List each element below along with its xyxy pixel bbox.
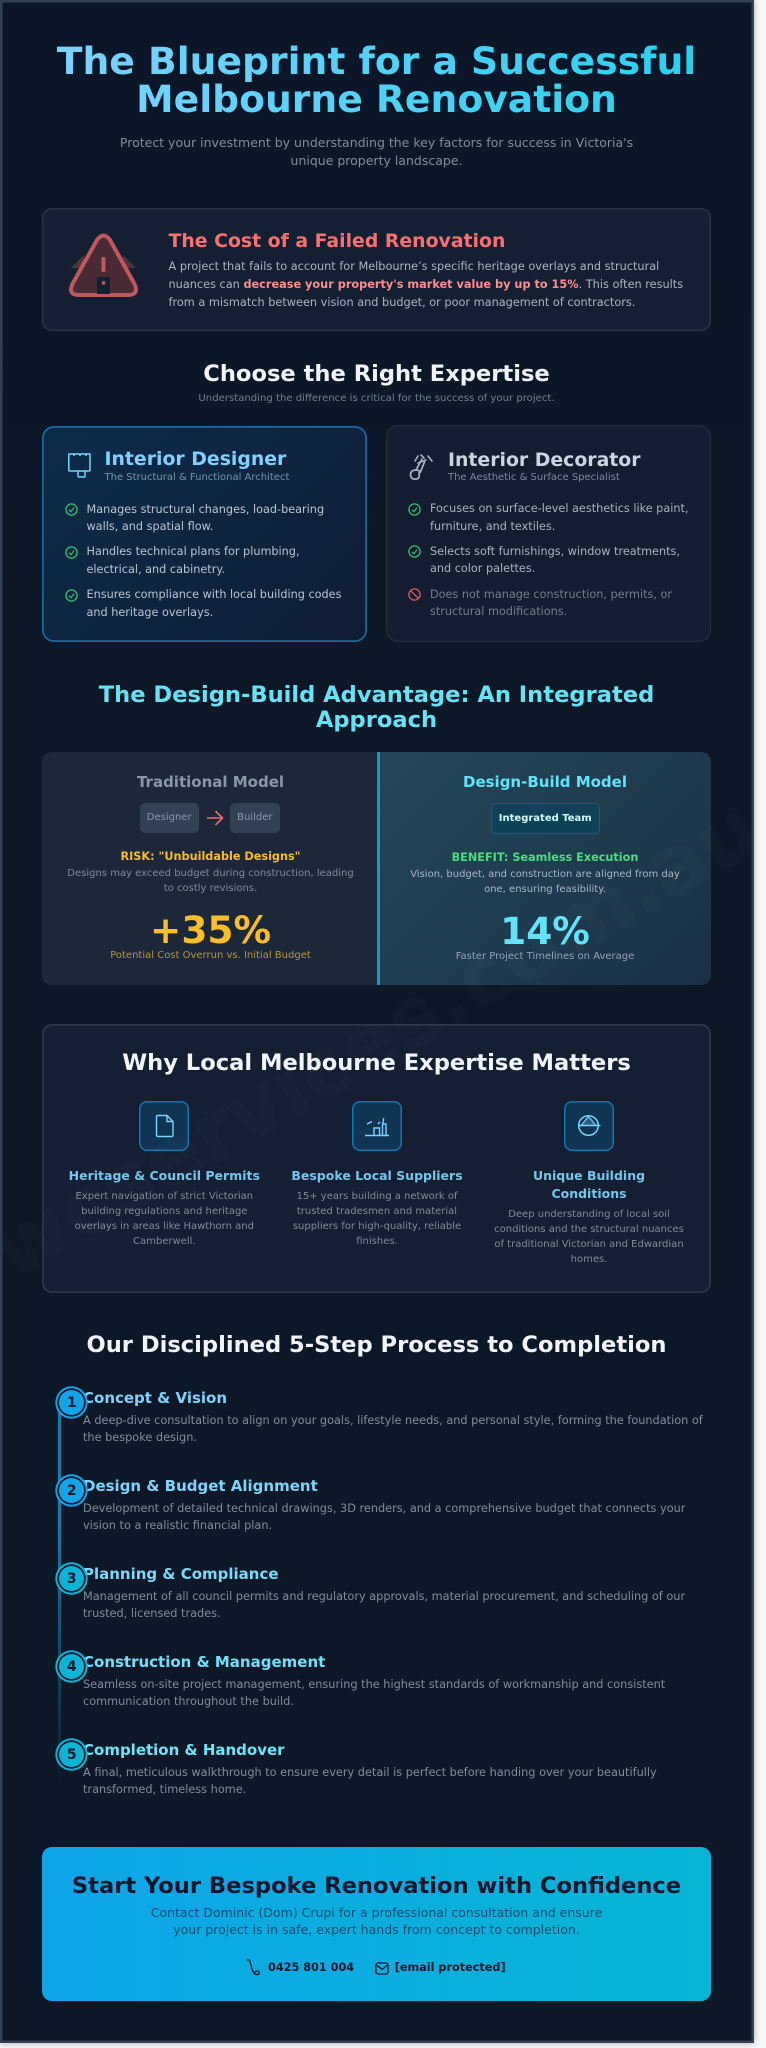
- chip: builder: Builder: [237, 812, 272, 823]
- panel: interior decorator: [386, 425, 711, 642]
- heading: process: Our Disciplined 5-Step Process to Completion: [87, 1332, 666, 1358]
- icon: paint brush: [410, 454, 433, 480]
- list item: compliance: [65, 588, 341, 619]
- step 1 text: [83, 1414, 703, 1444]
- chip: designer: Designer: [147, 812, 192, 823]
- text: risk description: Designs may exceed budget during construction, leading: [67, 868, 354, 879]
- column: unique building conditions: [494, 1101, 684, 1265]
- icon: blueprint board: [68, 453, 91, 478]
- list item: compliance: and heritage overlays.: [86, 606, 213, 619]
- step 2 number: 2: [67, 1483, 77, 1499]
- phone number: 0425 801 004: [268, 1961, 354, 1974]
- step 5 number: 5: [67, 1747, 77, 1763]
- subtitle: [120, 135, 633, 168]
- stat: +35%: +35%: [150, 908, 271, 952]
- column text: of traditional Victorian and Edwardian: [494, 1239, 684, 1250]
- text: cost explanation: from a mismatch between vision and budget, or poor management of contractors.: [168, 296, 635, 309]
- chip: designer: [140, 803, 199, 833]
- column text: building regulations and heritage: [81, 1206, 247, 1217]
- list item: does not manage construction: [408, 588, 672, 618]
- text: benefit description: one, ensuring feasibility.: [484, 884, 606, 895]
- column text: [293, 1191, 461, 1247]
- list item: soft furnishings: and color palettes.: [430, 562, 535, 575]
- heading: design-build advantage: The Design-Build Advantage: An Integrated: [99, 682, 654, 708]
- subtitle: Protect your investment by understanding the key factors for success in Victoria's: [120, 135, 633, 150]
- text: benefit description: [410, 869, 680, 895]
- text: call to action: [151, 1905, 602, 1937]
- chip: builder: [230, 803, 280, 833]
- heading: local expertise: Why Local Melbourne Expertise Matters: [122, 1050, 631, 1076]
- list item: soft furnishings: Selects soft furnishings, window treatments,: [430, 545, 680, 558]
- step 4 number: [59, 1654, 84, 1679]
- column text: [75, 1191, 254, 1247]
- column: heritage and council permits: [69, 1101, 260, 1247]
- step 1: [55, 1386, 703, 1444]
- text: benefit description: Vision, budget, and construction are aligned from day: [410, 869, 680, 880]
- step 3 number: 3: [67, 1571, 77, 1587]
- text: cost explanation: A project that fails to account for Melbourne’s specific heritage overlays and structural: [168, 260, 659, 273]
- step 5 text: A final, meticulous walkthrough to ensure every detail is perfect before handing over your beautifully: [83, 1766, 657, 1778]
- panel: cost of a failed renovation: [42, 208, 711, 331]
- column text: 15+ years building a network of: [297, 1191, 457, 1202]
- step 3 number: [59, 1566, 84, 1591]
- chip: integrated team: Integrated Team: [499, 813, 592, 824]
- column text: Camberwell.: [133, 1236, 196, 1247]
- step 4 text: Seamless on-site project management, ensuring the highest standards of workmanship and consistent: [83, 1678, 665, 1690]
- text: decorator tagline: The Aesthetic & Surface Specialist: [448, 472, 620, 483]
- text: call to action: Contact Dominic (Dom) Crupi for a professional consultation and ensure: [151, 1905, 602, 1920]
- subtitle: unique property landscape.: [291, 153, 462, 168]
- step 2 number: [59, 1478, 84, 1503]
- list item: surface aesthetics: Focuses on surface-level aesthetics like paint,: [430, 502, 688, 515]
- text: cost explanation: nuances can decrease your property's market value by up to 15%. This often results: [168, 278, 683, 291]
- step 3 title: Planning & Compliance: [83, 1565, 279, 1583]
- heading: call to action: Start Your Bespoke Renovation with Confidence: [72, 1873, 681, 1899]
- column text: [494, 1209, 684, 1265]
- step 2 text: vision to a realistic financial plan.: [83, 1519, 272, 1532]
- panel: local expertise: [42, 1024, 711, 1293]
- step 2 title: Design & Budget Alignment: [83, 1477, 318, 1495]
- icon: phone: [246, 1959, 260, 1976]
- column text: suppliers for high-quality, reliable: [293, 1221, 461, 1232]
- panel: call to action: [42, 1847, 711, 2001]
- list item: technical plans: electrical, and cabinetry.: [86, 563, 225, 576]
- column title: Heritage & Council Permits: [69, 1168, 260, 1183]
- benefit label: BENEFIT: Seamless Execution: [452, 851, 638, 864]
- text: risk description: [67, 868, 354, 894]
- column text: overlays in areas like Hawthorn and: [75, 1221, 254, 1232]
- contact row: [246, 1959, 506, 1976]
- panel: traditional vs design-build comparison: [42, 752, 711, 985]
- icon: warning triangle house: [69, 234, 138, 297]
- text: cost explanation: [168, 260, 683, 309]
- column text: trusted tradesmen and material: [297, 1206, 457, 1217]
- text: expertise subheading: Understanding the difference is critical for the success of your project.: [198, 393, 555, 404]
- column: design-build model: [380, 752, 711, 985]
- list item: technical plans: Handles technical plans for plumbing,: [86, 545, 300, 558]
- column title: Unique Building: [533, 1168, 645, 1183]
- column: traditional model: [42, 752, 377, 985]
- heading: traditional model: Traditional Model: [137, 773, 284, 791]
- step 5: [55, 1738, 657, 1796]
- step 5 text: [83, 1766, 657, 1796]
- icon: foundation globe: [564, 1101, 614, 1151]
- column text: finishes.: [356, 1236, 398, 1247]
- step 5 text: transformed, timeless home.: [83, 1783, 246, 1796]
- step 3 text: Management of all council permits and regulatory approvals, material procurement, and scheduling of our: [83, 1590, 685, 1602]
- step 2: [55, 1474, 686, 1532]
- column: bespoke local suppliers: [291, 1101, 463, 1247]
- column title: Conditions: [551, 1186, 627, 1201]
- text: call to action: your project is in safe, expert hands from concept to completion.: [173, 1922, 580, 1937]
- list item: structural changes: Manages structural changes, load-bearing: [86, 503, 324, 516]
- chip: integrated team: [490, 803, 600, 834]
- step 3 text: trusted, licensed trades.: [83, 1607, 221, 1620]
- list item: structural changes: [65, 503, 324, 533]
- heading: cost of failure: The Cost of a Failed Renovation: [168, 231, 505, 252]
- list item: technical plans: [65, 545, 300, 576]
- step 5 title: Completion & Handover: [83, 1741, 285, 1759]
- heading: interior decorator: Interior Decorator: [448, 450, 641, 470]
- text: risk description: to costly revisions.: [164, 883, 257, 894]
- icon: buildings: [352, 1101, 402, 1151]
- title: The Blueprint for a Successful: [57, 39, 696, 83]
- list item: compliance: Ensures compliance with local building codes: [86, 588, 341, 601]
- step 1 title: Concept & Vision: [83, 1389, 227, 1407]
- step 1 text: A deep-dive consultation to align on your goals, lifestyle needs, and personal style, forming the foundation of: [83, 1414, 703, 1426]
- column text: conditions and the structural nuances: [494, 1224, 684, 1235]
- step 4 number: 4: [67, 1659, 77, 1675]
- list item: surface aesthetics: furniture, and textiles.: [430, 520, 555, 533]
- step 1 number: [59, 1390, 84, 1415]
- step 4 text: communication throughout the build.: [83, 1695, 294, 1708]
- column text: homes.: [571, 1254, 607, 1265]
- stat: 14%: 14%: [500, 909, 590, 953]
- icon: red arrow: [207, 810, 224, 826]
- column text: Expert navigation of strict Victorian: [75, 1191, 253, 1202]
- title: Melbourne Renovation: [136, 77, 617, 121]
- icon: document: [139, 1101, 189, 1151]
- stat caption: faster timelines: Faster Project Timelines on Average: [456, 951, 634, 962]
- step 3 text: [83, 1590, 686, 1620]
- heading: interior designer: Interior Designer: [104, 449, 286, 470]
- list item: surface aesthetics: [408, 502, 688, 533]
- list item: soft furnishings: [408, 545, 680, 575]
- column title: Bespoke Local Suppliers: [291, 1168, 463, 1183]
- list item: does not manage construction: structural modifications.: [430, 605, 567, 618]
- step 2 text: Development of detailed technical drawings, 3D renders, and a comprehensive budget that connects your: [83, 1502, 685, 1514]
- step 5 number: [59, 1742, 84, 1767]
- stat caption: cost overrun: Potential Cost Overrun vs. Initial Budget: [110, 950, 311, 961]
- step 4 text: [83, 1678, 665, 1708]
- column text: Deep understanding of local soil: [508, 1209, 670, 1220]
- heading: design-build advantage: Approach: [316, 706, 437, 732]
- list item: structural changes: walls, and spatial flow.: [86, 520, 213, 533]
- panel: interior designer: [42, 426, 366, 642]
- list item: does not manage construction: Does not manage construction, permits, or: [430, 588, 672, 600]
- step 1 number: 1: [67, 1395, 77, 1411]
- heading: design-build advantage: [98, 682, 654, 732]
- icon: mail: [375, 1962, 389, 1975]
- step 3: [55, 1562, 686, 1620]
- text: designer tagline: The Structural & Functional Architect: [104, 472, 289, 483]
- step 2 text: [83, 1502, 686, 1532]
- timeline: vertical line: [58, 1410, 61, 1786]
- email address: [email protected]: [395, 1961, 506, 1974]
- heading: choose the right expertise: Choose the Right Expertise: [203, 361, 550, 387]
- heading: design-build model: Design-Build Model: [463, 773, 627, 791]
- step 1 text: the bespoke design.: [83, 1431, 197, 1444]
- step 4 title: Construction & Management: [83, 1653, 325, 1671]
- title: [40, 43, 713, 118]
- step 4: [55, 1650, 665, 1708]
- risk label: RISK: "Unbuildable Designs": [120, 850, 301, 863]
- column title: [533, 1168, 645, 1201]
